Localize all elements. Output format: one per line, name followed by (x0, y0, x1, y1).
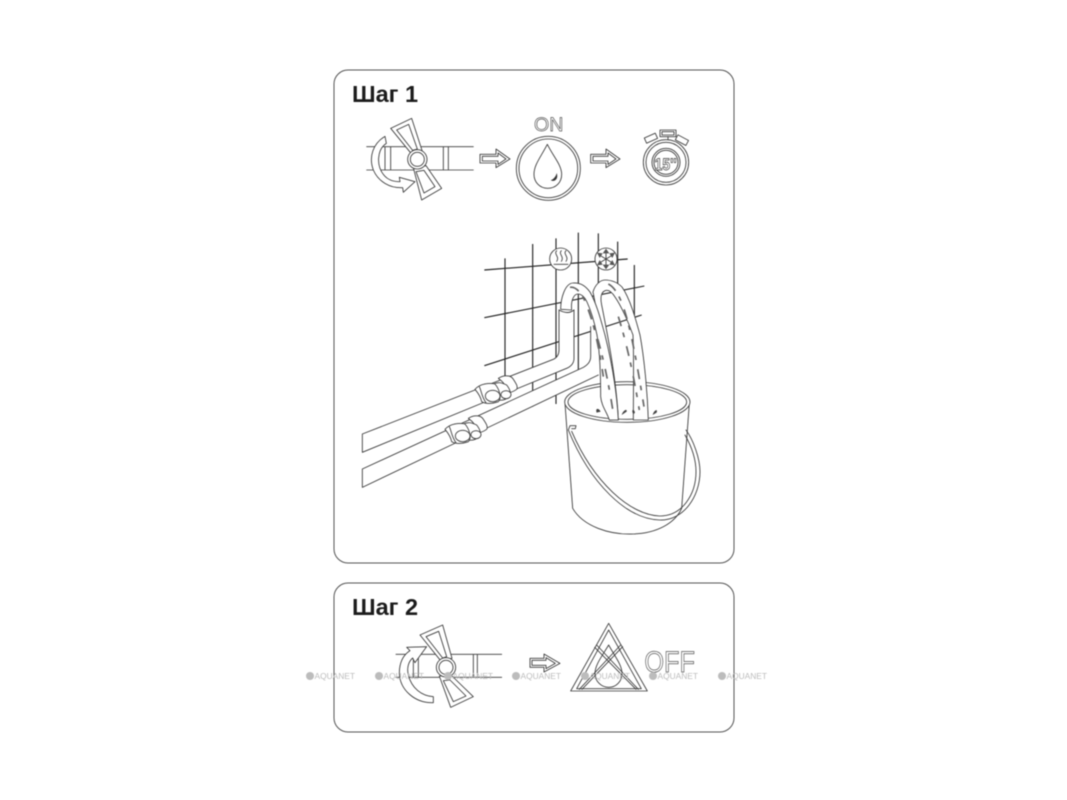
panel: step 1 (334, 70, 734, 563)
icon: cold water (595, 248, 617, 270)
label: OFF: OFF (644, 646, 695, 679)
arrow (530, 654, 560, 672)
watermark row: AQUANET (452, 671, 493, 681)
icon: water off warning (571, 623, 647, 691)
lower pipe fitting (445, 416, 487, 443)
heading: step 2: Шаг 2 (352, 594, 418, 620)
pipes (362, 310, 598, 487)
upper pipe fitting (475, 376, 517, 403)
arrow (480, 149, 510, 168)
icon: pipe with valve closed (396, 625, 502, 707)
panel: step 2 (334, 583, 734, 732)
bucket (565, 382, 700, 534)
icon: water on (516, 115, 580, 200)
icon: pipe with valve turned (367, 118, 473, 200)
watermark row: AQUANET (726, 671, 767, 681)
water streams (561, 280, 657, 420)
watermark row (306, 671, 767, 681)
wall tile grid (484, 233, 644, 407)
watermark row: AQUANET (658, 671, 698, 681)
arrow (591, 149, 620, 168)
step 1 icon row (367, 115, 689, 200)
icon: stopwatch 15 seconds: 15'' (655, 155, 677, 174)
illustration: pipes, hoses and bucket (362, 233, 700, 534)
heading: step 1: Шаг 1 (352, 81, 418, 107)
icon: hot water (550, 248, 572, 270)
icon: water on: ON (534, 115, 563, 136)
step 2 icon row (396, 623, 695, 707)
icon: stopwatch 15 seconds (643, 130, 689, 185)
watermark row: AQUANET (314, 671, 355, 681)
watermark row: AQUANET (384, 671, 424, 681)
watermark row: AQUANET (590, 671, 630, 681)
watermark row: AQUANET (520, 671, 561, 681)
